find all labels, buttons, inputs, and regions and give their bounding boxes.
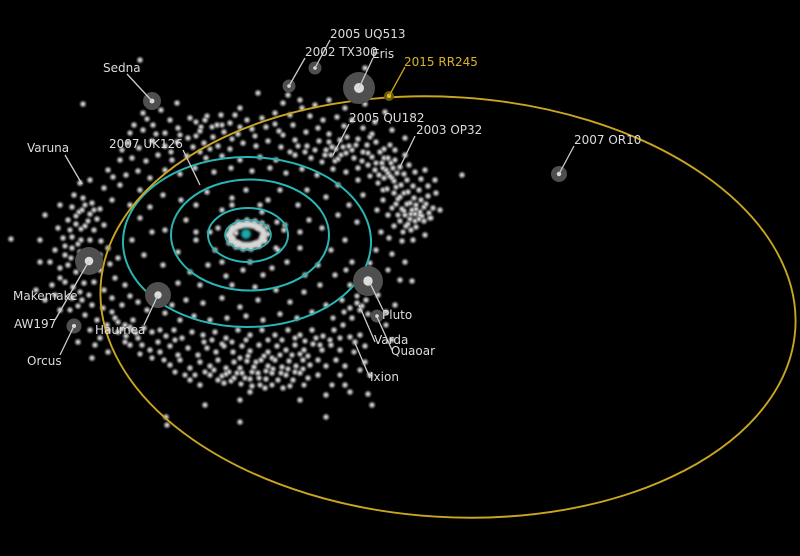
label 2005 QU182: 2005 QU182 bbox=[349, 111, 424, 125]
Makemake bbox=[75, 247, 103, 275]
label Pluto: Pluto bbox=[382, 308, 412, 322]
outer cyan orbit bbox=[123, 157, 371, 327]
sun and inner planets bbox=[241, 229, 251, 239]
label 2003 OP32: 2003 OP32 bbox=[416, 123, 482, 137]
2015 RR245 orbit bbox=[88, 76, 800, 538]
2005 UQ513 bbox=[308, 62, 322, 74]
Orcus bbox=[66, 318, 82, 334]
label 2002 TX300: 2002 TX300 bbox=[305, 45, 378, 59]
label Quaoar: Quaoar bbox=[391, 344, 435, 358]
leader lines bbox=[55, 40, 574, 378]
label Haumea: Haumea bbox=[95, 323, 145, 337]
second cyan orbit bbox=[171, 180, 329, 290]
third cyan orbit bbox=[208, 208, 288, 262]
labels bbox=[13, 27, 641, 384]
yellow leader line bbox=[389, 67, 405, 96]
Eris bbox=[343, 72, 375, 104]
inner asteroid ring bbox=[225, 220, 271, 250]
Haumea bbox=[145, 282, 171, 308]
label Varuna: Varuna bbox=[27, 141, 69, 155]
2015 RR245 marker bbox=[384, 91, 394, 101]
label 2007 OR10: 2007 OR10 bbox=[574, 133, 641, 147]
label Ixion: Ixion bbox=[370, 370, 399, 384]
2002 TX300 bbox=[282, 80, 296, 92]
Quaoar bbox=[370, 310, 384, 322]
label Sedna: Sedna bbox=[103, 61, 141, 75]
label Varda: Varda bbox=[374, 333, 408, 347]
label Orcus: Orcus bbox=[27, 354, 62, 368]
label 2015 RR245: 2015 RR245 bbox=[404, 55, 478, 69]
2007 OR10 bbox=[551, 166, 567, 182]
Sedna bbox=[143, 92, 161, 110]
label 2005 UQ513: 2005 UQ513 bbox=[330, 27, 406, 41]
label Makemake: Makemake bbox=[13, 289, 78, 303]
label AW197: AW197 bbox=[14, 317, 56, 331]
label Eris: Eris bbox=[372, 47, 394, 61]
orbits bbox=[88, 76, 800, 538]
label 2007 UK126: 2007 UK126 bbox=[109, 137, 183, 151]
large bodies bbox=[66, 62, 567, 334]
Kuiper belt object cloud bbox=[11, 60, 462, 425]
Pluto bbox=[353, 266, 383, 296]
